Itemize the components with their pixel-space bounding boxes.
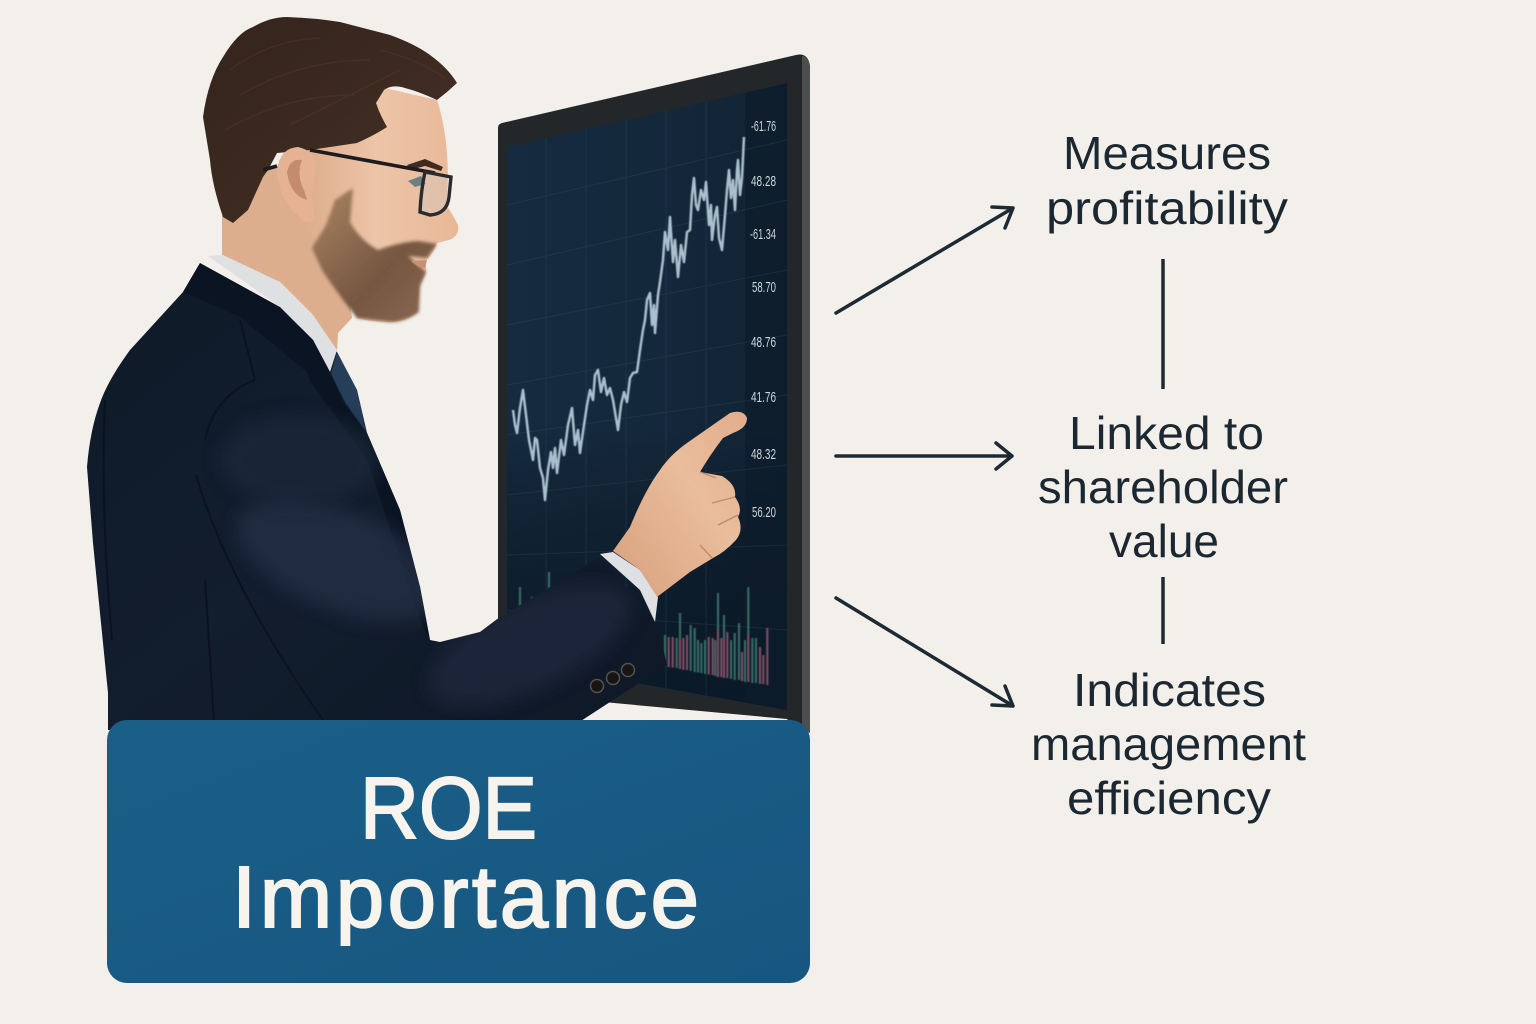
title panel (107, 720, 810, 983)
face (295, 88, 458, 322)
label: indicates management efficiency: management (1031, 718, 1306, 770)
connector: lower (1161, 577, 1165, 644)
axis labels: 58.70 (752, 280, 776, 296)
eyebrow (407, 159, 443, 171)
lapel (183, 263, 430, 640)
screen right strip (745, 83, 787, 710)
axis labels: -61.76 (751, 119, 776, 135)
label: linked to shareholder value (1038, 407, 1288, 567)
ear (277, 147, 316, 222)
label: indicates management efficiency (1031, 664, 1306, 824)
arrow: to measures profitability (836, 207, 1013, 313)
axis labels: -61.34 (750, 227, 776, 243)
suit body (87, 263, 667, 730)
hair strands (225, 38, 445, 130)
axis labels (750, 119, 776, 521)
lips (411, 260, 427, 268)
arrow: to indicates management efficiency (836, 598, 1013, 706)
title text: ROE (360, 760, 537, 857)
axis labels: 56.20 (752, 505, 776, 521)
label: linked to shareholder value: Linked to (1069, 407, 1264, 459)
sleeve highlights (225, 418, 628, 705)
monitor screen (507, 83, 787, 710)
sleeve seams (104, 320, 330, 730)
screen lower shade (507, 83, 787, 710)
shirt collar (208, 255, 337, 372)
glasses (263, 150, 451, 215)
monitor side edge (802, 56, 810, 733)
axis labels: 48.32 (751, 447, 776, 463)
label: measures profitability (1046, 127, 1288, 234)
arrow: to linked to shareholder value (836, 443, 1012, 469)
axis labels: 48.28 (751, 174, 776, 190)
businessman figure (87, 17, 747, 732)
beard (312, 188, 437, 322)
label: indicates management efficiency: Indicates (1073, 664, 1266, 716)
label: measures profitability: profitability (1046, 182, 1288, 234)
price line chart (513, 137, 744, 500)
volume bars (520, 572, 767, 685)
label: indicates management efficiency: efficiency (1067, 772, 1271, 824)
infographic canvas (87, 17, 1306, 983)
necktie (331, 352, 366, 432)
hair (203, 17, 457, 223)
jacket buttons (590, 664, 634, 692)
title text: Importance (232, 849, 699, 946)
knuckle lines (700, 472, 738, 558)
shirt cuff (600, 552, 658, 622)
neck (222, 150, 352, 352)
axis labels: 41.76 (751, 390, 776, 406)
label: measures profitability: Measures (1063, 127, 1271, 179)
axis labels: 48.76 (751, 335, 776, 351)
hand pointing (613, 412, 747, 597)
eye (408, 176, 426, 187)
ear inner (287, 160, 307, 200)
label: linked to shareholder value: value (1109, 515, 1219, 567)
connector: upper (1161, 259, 1165, 389)
label: linked to shareholder value: shareholder (1038, 461, 1288, 513)
monitor with stock chart (498, 54, 810, 733)
title text (232, 760, 699, 946)
monitor frame (498, 54, 810, 733)
chart grid (507, 101, 787, 700)
